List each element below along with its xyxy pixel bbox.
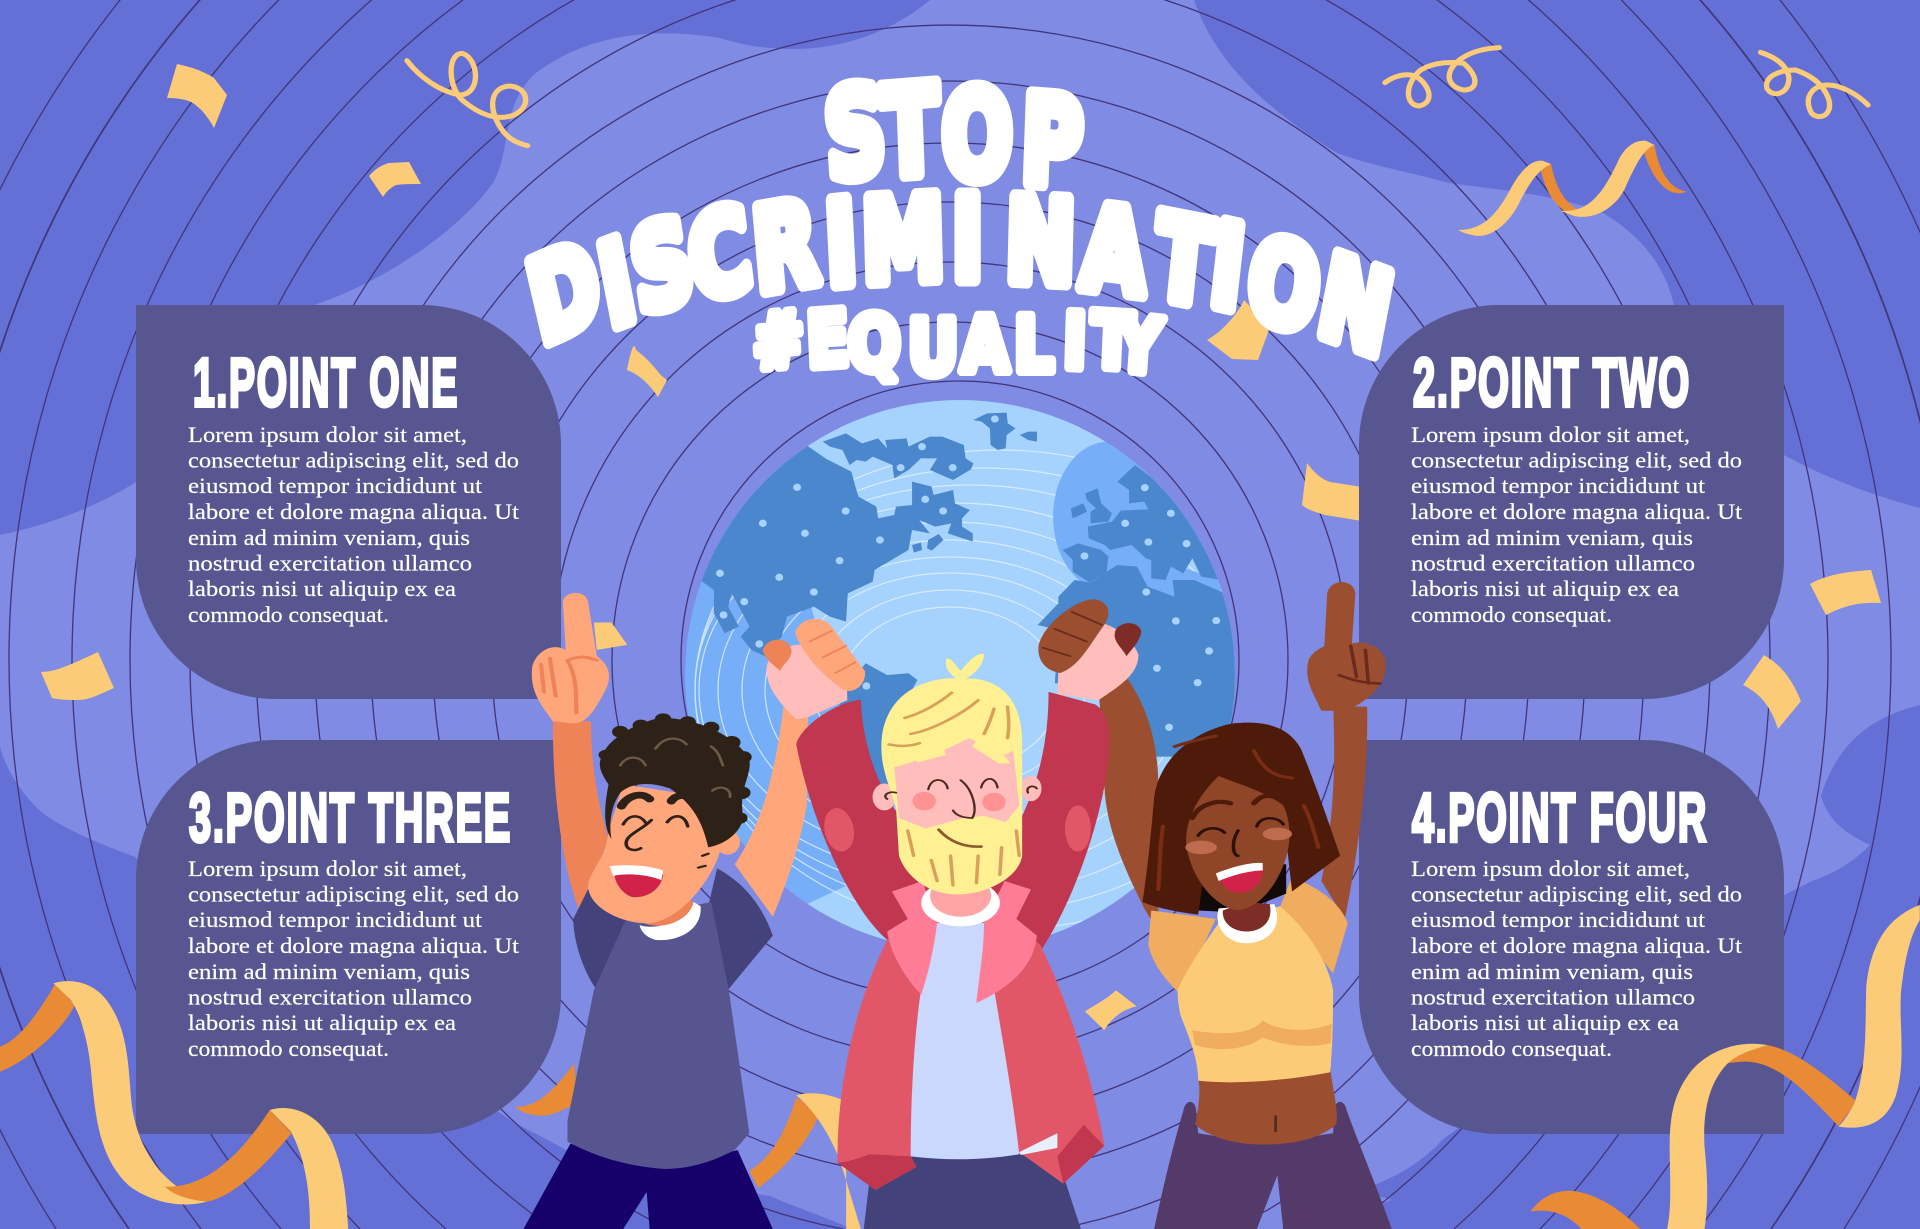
head: [588, 784, 721, 923]
text block: point two: commodo consequat.: [1411, 602, 1612, 627]
text block: point three: commodo consequat.: [188, 1036, 389, 1061]
text block: point four: eiusmod tempor incididunt ut: [1411, 907, 1705, 932]
neck and collar: [1217, 904, 1277, 943]
text block: point four: enim ad minim veniam, quis: [1411, 959, 1693, 984]
lapels: [887, 881, 937, 995]
text block: point one: Lorem ipsum dolor sit amet,: [188, 422, 467, 447]
sleeves: [796, 699, 958, 940]
text block: point three: laboris nisi ut aliquip ex ea: [188, 1010, 456, 1035]
jacket: [837, 906, 1104, 1190]
text block: point four: Lorem ipsum dolor sit amet,: [1411, 856, 1690, 881]
text block: point two: eiusmod tempor incididunt ut: [1411, 473, 1705, 498]
pointing hand: [532, 593, 609, 723]
raised hands: [763, 599, 1141, 719]
text block: point four: laboris nisi ut aliquip ex ea: [1411, 1010, 1679, 1035]
squiggles and ribbon: top right: [1385, 48, 1868, 236]
head: [873, 654, 1042, 894]
confetti near title: [627, 300, 1270, 397]
text block: point two: Lorem ipsum dolor sit amet,: [1411, 422, 1690, 447]
person: left, pointing man: [523, 593, 808, 1229]
text block: point one: commodo consequat.: [188, 602, 389, 627]
panel: point three: [136, 740, 561, 1134]
title line: #EQUALITY: #EQUALITY: [750, 294, 1165, 393]
confetti around people: [594, 623, 1137, 1030]
face: [621, 795, 708, 868]
pointing hand: [1307, 582, 1386, 711]
face: [1186, 776, 1289, 910]
text block: point three: Lorem ipsum dolor sit amet,: [188, 856, 467, 881]
person: centre, blond man: [763, 599, 1141, 1229]
title line: STOP: STOP: [820, 58, 1085, 216]
text block: point three: consectetur adipiscing elit, sed do: [188, 882, 519, 906]
text block: point one: consectetur adipiscing elit, sed do: [188, 448, 519, 472]
text block: point two: labore et dolore magna aliqua. Ut: [1411, 499, 1742, 524]
text block: point two: consectetur adipiscing elit, sed do: [1411, 448, 1742, 472]
text block: point one: nostrud exercitation ullamco: [188, 550, 472, 576]
panel: point four: [1359, 740, 1784, 1134]
text block: point three: enim ad minim veniam, quis: [188, 959, 470, 984]
panel: point one: [136, 305, 561, 699]
text block: point one: labore et dolore magna aliqua. Ut: [188, 499, 519, 524]
squiggle: top left: [407, 53, 528, 146]
text block: point two: nostrud exercitation ullamco: [1411, 550, 1695, 576]
confetti behind panels: [41, 64, 1881, 729]
text block: point two: enim ad minim veniam, quis: [1411, 525, 1693, 550]
person: right, pointing woman: [1098, 582, 1392, 1229]
text block: point four: commodo consequat.: [1411, 1036, 1612, 1061]
pants: [864, 1148, 1081, 1229]
ribbon behind people: [749, 1093, 861, 1229]
text block: point one: enim ad minim veniam, quis: [188, 525, 470, 550]
heading: point two: 2.POINT TWO: [1413, 344, 1691, 421]
heading: point four: 4.POINT FOUR: [1412, 779, 1708, 856]
text block: point three: nostrud exercitation ullamco: [188, 984, 472, 1010]
curly hair: [599, 713, 752, 847]
title: [517, 58, 1401, 393]
pants: [1154, 1102, 1392, 1229]
heading: point three: 3.POINT THREE: [189, 779, 512, 856]
midriff: [1195, 1068, 1337, 1145]
pants: [523, 1144, 773, 1229]
t-shirt: [911, 923, 1019, 1159]
text block: point four: [1411, 856, 1742, 1061]
title line: DISCRIMINATION: DISCRIMINATION: [517, 171, 1401, 384]
ribbon: bottom right: [1531, 905, 1920, 1229]
text block: point four: labore et dolore magna aliqua. Ut: [1411, 933, 1742, 958]
text block: point three: [188, 856, 519, 1061]
text block: point two: [1411, 422, 1742, 627]
shirt: [573, 889, 626, 990]
text block: point four: consectetur adipiscing elit, sed do: [1411, 882, 1742, 906]
people illustration: [523, 582, 1392, 1229]
neck and collar: [921, 879, 1000, 926]
heading: point one: 1.POINT ONE: [193, 344, 459, 421]
globe: [685, 400, 1235, 940]
back hair: [1195, 864, 1286, 913]
text block: point one: [188, 422, 519, 627]
text block: point two: laboris nisi ut aliquip ex ea: [1411, 576, 1679, 601]
text block: point one: eiusmod tempor incididunt ut: [188, 473, 482, 498]
ribbon: bottom left: [0, 981, 578, 1229]
text block: point three: eiusmod tempor incididunt ut: [188, 907, 482, 932]
text block: point one: laboris nisi ut aliquip ex ea: [188, 576, 456, 601]
panel: point two: [1359, 305, 1784, 699]
neck and collar: [640, 902, 701, 940]
text block: point four: nostrud exercitation ullamco: [1411, 984, 1695, 1010]
shirt: [1148, 910, 1216, 995]
text block: point three: labore et dolore magna aliqua. Ut: [188, 933, 519, 958]
